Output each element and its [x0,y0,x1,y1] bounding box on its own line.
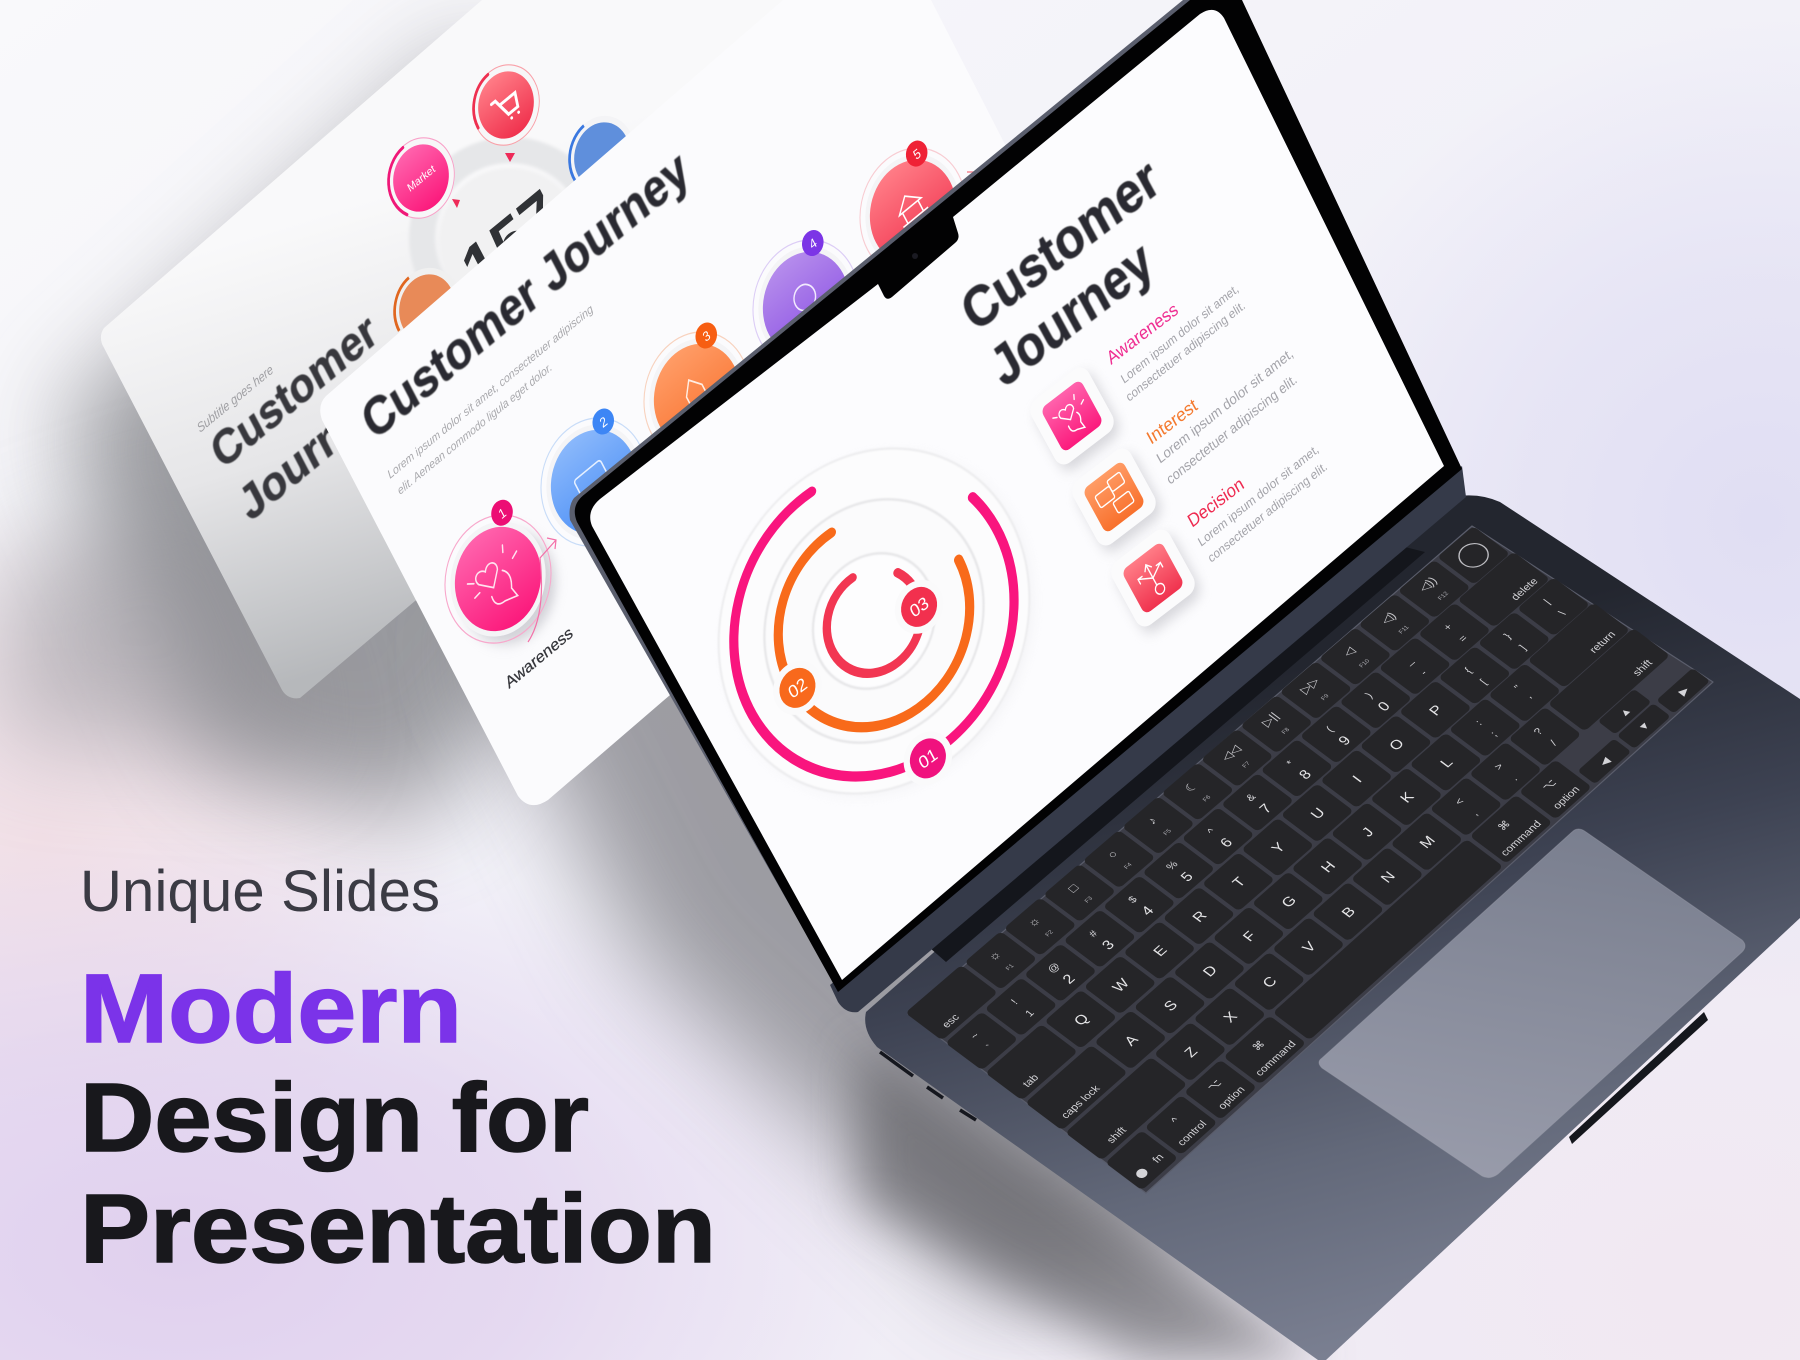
number row: 7 [1257,802,1276,817]
function row: F4 [1123,861,1134,871]
heading: customer journey: Customer Journey [353,139,697,451]
function row: ☼ [985,948,1004,964]
home row: G [1279,893,1300,911]
heading: slide title: Customer [203,303,385,479]
function row: ☾ [1182,779,1201,795]
home row: ; [1488,730,1500,739]
arrow 1 [528,538,556,642]
laptop [570,0,1800,1360]
heading: screen title: Journey [981,229,1162,399]
bottom row [1105,653,1710,1190]
icon: decision [1107,523,1204,638]
outer disc [663,380,1085,862]
number row: - [1418,668,1430,678]
circle: market: Market [406,163,437,195]
arc: pink [684,404,1064,838]
function row: F5 [1162,828,1174,837]
web connector behind circles [422,150,598,326]
webcam [912,253,918,259]
number row: 1 [1023,1008,1037,1019]
home row: return [1587,629,1618,655]
hinge slot [930,547,1425,962]
circle: market [375,122,467,234]
number row: 8 [1296,768,1315,783]
qwerty row: | [1541,597,1553,606]
shift row: X [1221,1010,1241,1026]
badge 01: 01 [915,744,941,773]
bottom row: option [1551,784,1583,812]
number row: ^ [1205,827,1218,837]
function row: ☼ [1024,914,1044,930]
function row: esc [940,1012,963,1030]
function row: ◁) [1378,610,1399,627]
trackpad [1319,829,1745,1178]
number row: 3 [1099,938,1118,953]
bottom row: ◀ [1597,755,1614,768]
qwerty row: T [1230,875,1249,890]
number row: $ [1126,894,1140,905]
home row: H [1319,859,1339,876]
number row: 9 [1336,734,1355,748]
function row: □ [1065,881,1082,895]
step 5: 5 [911,145,923,163]
function row: ◁)) [1416,574,1440,594]
text: eyebrow: Unique Slides [80,859,440,924]
chart: concentric rings [663,380,1090,871]
step 1: awareness: 1 [496,504,508,522]
function row: F2 [1044,929,1055,938]
bottom row: ⌥ [1206,1078,1224,1093]
number row: _ [1401,655,1417,668]
number row: 5 [1178,870,1197,885]
number row [945,552,1550,1070]
bottom row: fn [1150,1152,1167,1165]
badge 02 [765,650,830,726]
shift row: ? [1532,726,1546,737]
text: interest: consectetuer adipiscing elit. [1164,370,1299,488]
home row: A [1122,1033,1142,1049]
number row: delete [1509,576,1541,603]
function row: F11 [1397,624,1411,635]
shift row: , [1469,809,1481,818]
laptop base [865,495,1800,1360]
triangle markers [452,153,515,208]
function row: ◁◁ [1218,742,1244,764]
number row: ( [1324,725,1336,734]
shift row: shift [1631,658,1655,678]
middle disc [725,451,1023,791]
number row: # [1087,928,1101,940]
qwerty row: [ [1478,678,1490,687]
screen bezel [575,0,1462,992]
qwerty row: U [1308,806,1329,822]
text: interest: Lorem ipsum dolor sit amet, [1154,344,1296,467]
shift row: > [1492,761,1506,773]
home row: " [1512,683,1525,693]
function row: F1 [1005,963,1016,972]
icon: awareness [1026,361,1123,476]
function row: F10 [1358,658,1372,669]
arc: orange [744,473,1004,769]
keyboard well [908,526,1713,1193]
number row: * [1284,759,1297,769]
badge 02: 02 [785,673,810,703]
function row: ▷▷ [1297,675,1323,696]
ring shadow [676,392,1082,856]
function row: F12 [1437,590,1451,602]
qwerty row: W [1110,976,1133,995]
number row: @ [1045,961,1063,975]
step 1: awareness [424,487,574,675]
icon: interest [1068,442,1165,557]
qwerty row: } [1502,631,1514,641]
number row: ! [1009,998,1021,1007]
number row: ~ [968,1031,982,1042]
function row: F6 [1202,794,1213,803]
headline: design for: Design for [80,1063,589,1172]
function row: ♪ [1144,815,1160,827]
function row: ▷|| [1259,710,1282,729]
heading: slide title: Journey [231,374,391,531]
home row: D [1200,963,1221,980]
text: awareness: Lorem ipsum dolor sit amet, [1119,281,1241,387]
headline [80,954,716,1283]
arc: red [810,548,938,694]
text: decision: Lorem ipsum dolor sit amet, [1196,442,1321,550]
bottom row: ▼ [1636,720,1653,734]
function row: ○ [1104,848,1121,861]
shift row: . [1509,774,1520,783]
text: decision: consectetuer adipiscing elit. [1206,459,1329,566]
number row: 2 [1060,972,1079,987]
home row: caps lock [1059,1083,1103,1121]
shift row: shift [1105,1125,1129,1146]
bottom row: ▶ [1676,685,1692,698]
label: awareness: Awareness [503,624,576,693]
home row: F [1240,929,1260,945]
function row: F7 [1241,760,1252,769]
shift row: M [1417,834,1439,852]
bottom row: command [1499,819,1544,858]
bottom row: command [1253,1039,1299,1078]
qwerty row: O [1387,737,1408,754]
home row [1025,602,1630,1130]
qwerty row: ] [1517,643,1529,652]
shift row: V [1300,940,1320,956]
qwerty row: Q [1071,1012,1093,1029]
lid edge [570,0,1220,990]
shift row [1065,628,1670,1160]
step 4 [733,215,879,393]
home row: L [1438,756,1457,771]
qwerty row: I [1350,773,1366,786]
lid chin [830,466,1466,1012]
qwerty row: R [1190,909,1211,925]
number row: % [1164,859,1181,873]
step 4: 4 [807,235,819,252]
home row: ' [1528,695,1539,704]
big number: 157 [450,174,569,309]
front notch [1569,1012,1708,1144]
number row: ) [1363,691,1375,700]
circle: blue [556,100,648,212]
text: awareness: Awareness [1103,299,1181,369]
shift row: Z [1182,1045,1201,1060]
number row: 0 [1375,699,1394,714]
shift row: C [1260,974,1281,991]
function row: ◁ [1340,644,1359,659]
shadows cast by slides and laptop [0,40,1320,1360]
text: decision: Decision [1184,473,1247,532]
number row: & [1244,792,1259,804]
badge 03: 03 [907,592,932,622]
arrow 5 [958,172,976,186]
bottom row: ▲ [1617,705,1634,719]
step 3 [624,307,770,485]
shift row: N [1378,869,1399,886]
function row [905,526,1510,1040]
step 5 [840,123,986,301]
qwerty row: P [1427,703,1447,719]
function row: F8 [1280,726,1292,736]
shift row: < [1453,796,1467,808]
panel: back slide [101,0,900,698]
shift row: / [1548,739,1560,748]
badge 03 [886,569,952,644]
function row: F3 [1083,895,1095,904]
heading: screen title: Customer [952,147,1169,344]
step 2 [521,393,667,571]
step 2: 2 [597,413,610,431]
qwerty row: { [1462,666,1475,675]
circle: cart [460,49,552,161]
number row: + [1441,622,1455,633]
subtitle: Subtitle goes here [194,361,275,436]
qwerty row: Y [1269,840,1289,856]
number row: ` [984,1043,997,1052]
headline: modern: Modern [80,954,462,1063]
panel: middle slide [320,0,1100,805]
text: description: Lorem ipsum dolor sit amet, consectetuer adipiscing [386,303,596,482]
home row: J [1359,825,1377,840]
step 3: 3 [700,327,713,345]
inner disc [791,526,957,716]
text: awareness: consectetuer adipiscing elit. [1124,298,1247,405]
home row: : [1473,718,1485,727]
screen [590,10,1444,980]
shift row: B [1339,905,1359,921]
number row: = [1456,633,1470,644]
bottom row: ^ [1169,1115,1183,1126]
headline: presentation: Presentation [80,1174,716,1283]
text: description: elit. Aenean commodo ligula eget dolor. [396,361,554,498]
bottom row: option [1216,1085,1248,1112]
side ports [880,1052,976,1120]
badge 01 [895,721,961,796]
number row: 6 [1218,836,1236,851]
qwerty row: tab [1021,1072,1041,1090]
bottom row: control [1175,1119,1209,1148]
qwerty row: \ [1557,609,1568,618]
bottom row: ⌘ [1250,1039,1268,1053]
bottom row: ⌘ [1496,819,1513,833]
text: interest: Interest [1143,394,1201,449]
circle: orange [381,252,473,364]
home row: S [1161,998,1181,1014]
home row: K [1398,790,1418,806]
number row: 4 [1139,904,1158,919]
bottom row: ⌥ [1540,778,1559,793]
keyboard [905,526,1710,1190]
qwerty row: E [1151,943,1171,959]
qwerty row [985,577,1590,1100]
function row: F9 [1320,692,1331,702]
